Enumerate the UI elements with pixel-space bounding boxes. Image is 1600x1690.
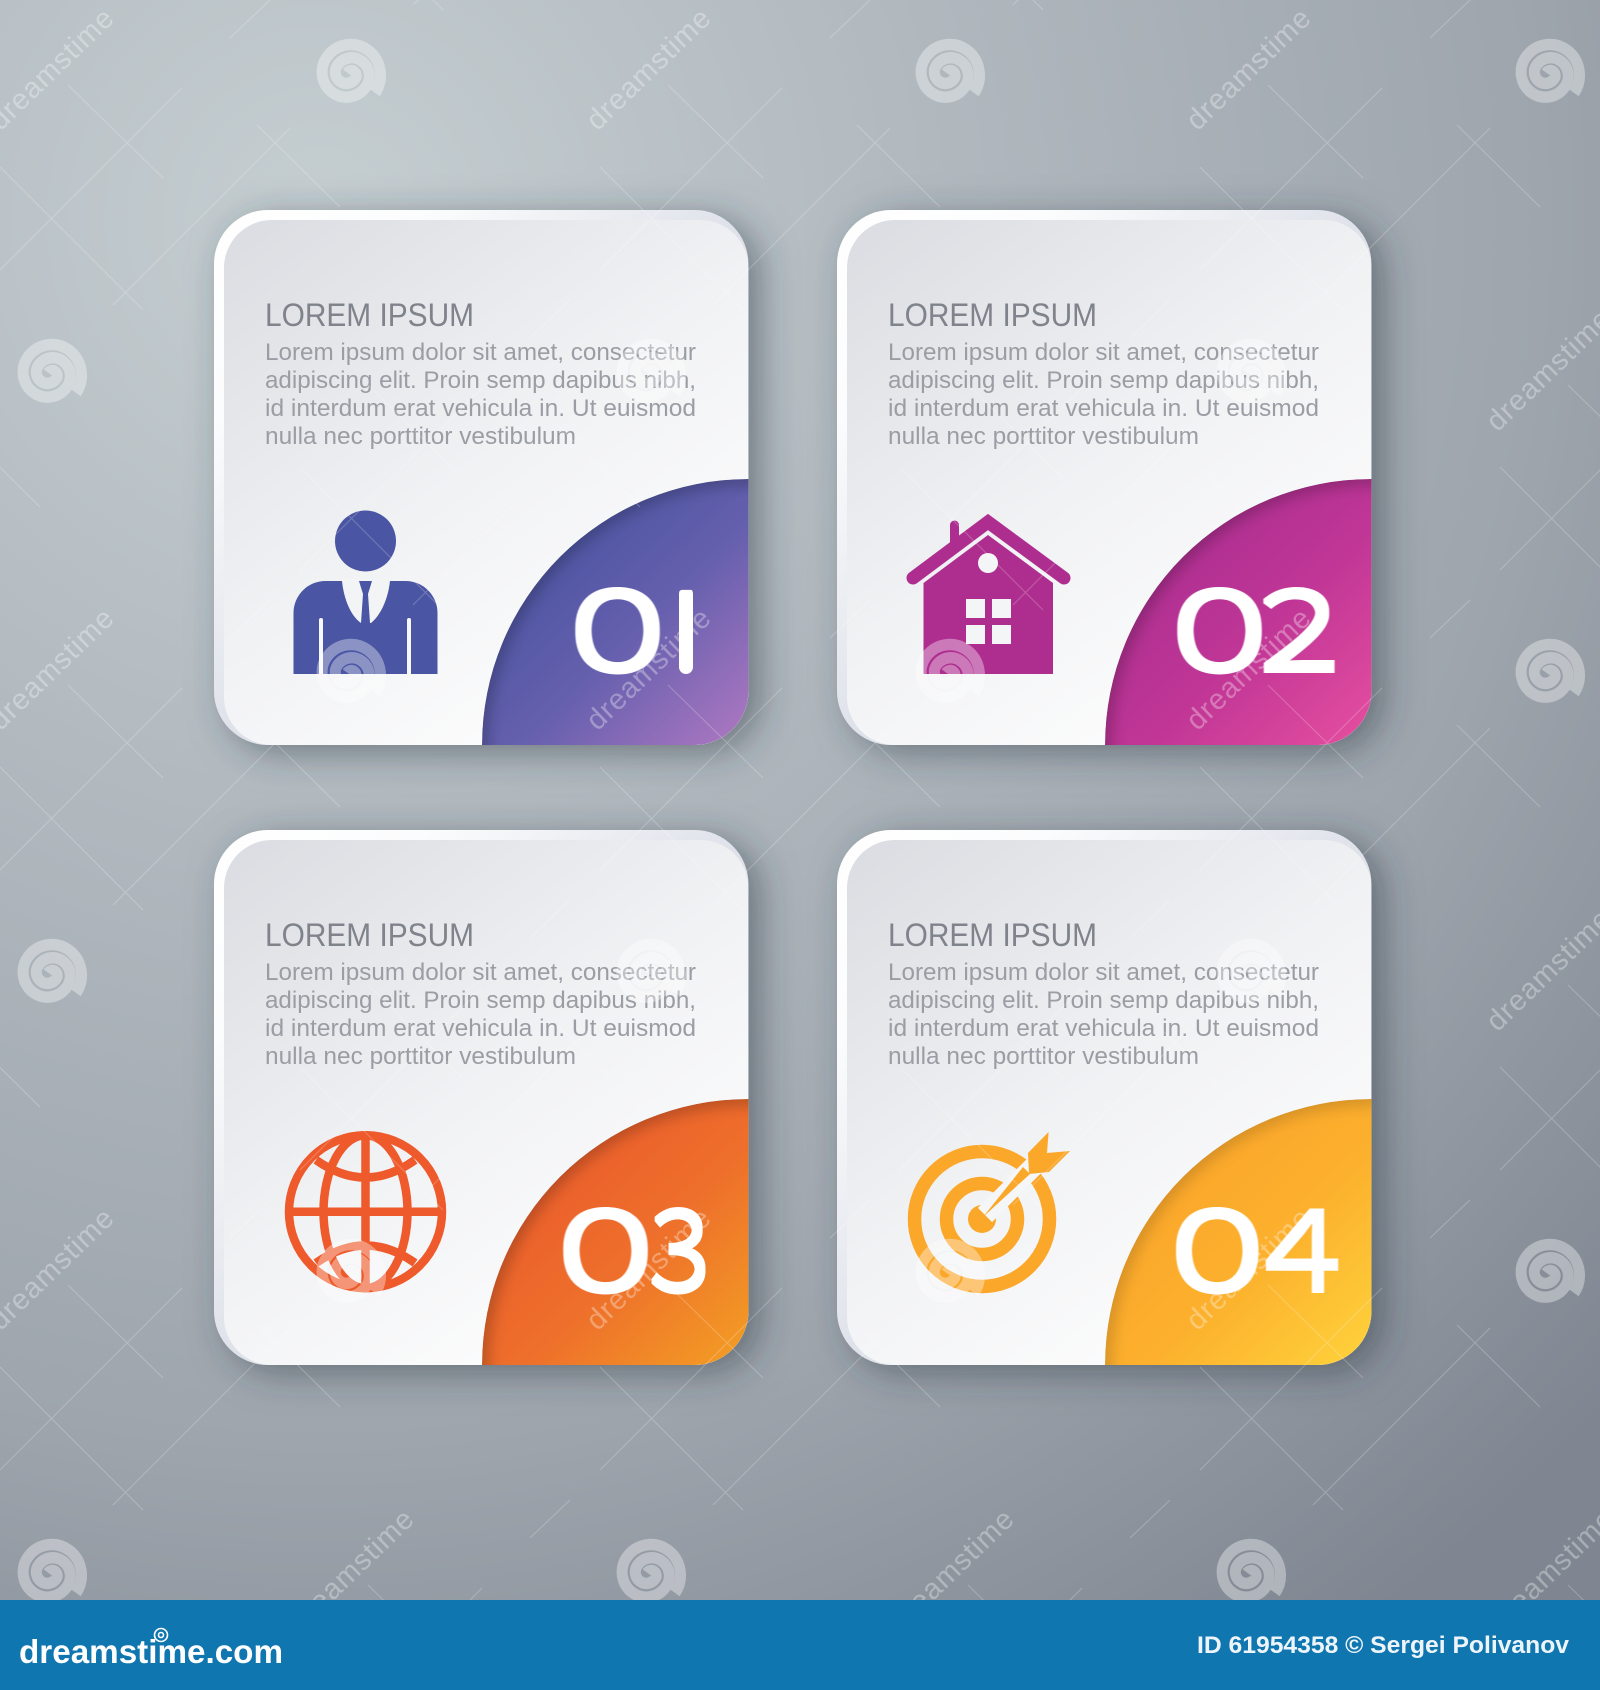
icon: businessman <box>294 510 438 674</box>
number 03: 3 <box>648 1160 712 1324</box>
body text: Lorem ipsum dolor sit amet, consectetur <box>265 339 696 366</box>
watermark overlay: dreamstime <box>283 1503 420 1638</box>
body text <box>265 959 696 1070</box>
panel: card 04 <box>826 815 1406 1394</box>
body text: adipiscing elit. Proin semp dapibus nibh, <box>265 367 696 394</box>
watermark overlay: dreamstime <box>883 1503 1020 1638</box>
watermark overlay: dreamstime <box>580 2 717 137</box>
icon: globe <box>289 1135 442 1288</box>
number 03 <box>554 1160 712 1324</box>
body text: adipiscing elit. Proin semp dapibus nibh, <box>265 987 696 1014</box>
number 04: 4 <box>1263 1161 1343 1324</box>
panel: card 01 <box>202 194 784 776</box>
corner quarter circle <box>482 1099 748 1365</box>
body text: adipiscing elit. Proin semp dapibus nibh, <box>888 987 1319 1014</box>
body text: Lorem ipsum dolor sit amet, consectetur <box>265 959 696 986</box>
watermark overlay: dreamstime <box>580 602 717 737</box>
icon: target with arrow <box>914 1132 1070 1286</box>
body text: nulla nec porttitor vestibulum <box>265 1043 576 1070</box>
corner quarter circle <box>1105 479 1372 745</box>
panel: card 02 <box>826 194 1406 776</box>
image id and credit: ID 61954358 © Sergei Polivanov <box>1197 1632 1570 1659</box>
heading: LOREM IPSUM <box>265 917 474 953</box>
body text: adipiscing elit. Proin semp dapibus nibh, <box>888 367 1319 394</box>
footer banner <box>0 1600 1600 1690</box>
logo text: dreamstime.com <box>19 1633 283 1670</box>
number 04: 0 <box>1167 1161 1267 1324</box>
heading: LOREM IPSUM <box>888 917 1097 953</box>
body text <box>888 339 1319 450</box>
body text: id interdum erat vehicula in. Ut euismod <box>265 1015 696 1042</box>
body text: nulla nec porttitor vestibulum <box>265 423 576 450</box>
number 04 <box>1167 1161 1343 1324</box>
logo spiral <box>154 1628 168 1642</box>
watermark overlay: dreamstime <box>1180 602 1317 737</box>
body text: id interdum erat vehicula in. Ut euismod <box>888 395 1319 422</box>
body text <box>265 339 696 450</box>
body text: nulla nec porttitor vestibulum <box>888 1043 1199 1070</box>
icon: house <box>913 520 1064 674</box>
corner quarter circle <box>482 479 748 745</box>
number 01: 1 <box>624 538 742 708</box>
heading: LOREM IPSUM <box>265 297 474 333</box>
number 03: 0 <box>554 1161 657 1324</box>
panel: card 03 <box>202 814 783 1396</box>
corner quarter circle <box>1105 1099 1372 1365</box>
body text: Lorem ipsum dolor sit amet, consectetur <box>888 339 1319 366</box>
body text: Lorem ipsum dolor sit amet, consectetur <box>888 959 1319 986</box>
number 01: 0 <box>566 541 669 704</box>
watermark overlay: dreamstime <box>1180 1202 1317 1337</box>
number 02 <box>1168 540 1342 704</box>
body text <box>888 959 1319 1070</box>
watermark overlay: dreamstime <box>1180 2 1317 137</box>
heading: LOREM IPSUM <box>888 297 1097 333</box>
watermark overlay: dreamstime <box>580 1202 717 1337</box>
number 01 <box>574 587 693 674</box>
body text: id interdum erat vehicula in. Ut euismod <box>888 1015 1319 1042</box>
body text: nulla nec porttitor vestibulum <box>888 423 1199 450</box>
number 02: 2 <box>1257 540 1342 704</box>
body text: id interdum erat vehicula in. Ut euismod <box>265 395 696 422</box>
number 02: 0 <box>1168 541 1271 704</box>
